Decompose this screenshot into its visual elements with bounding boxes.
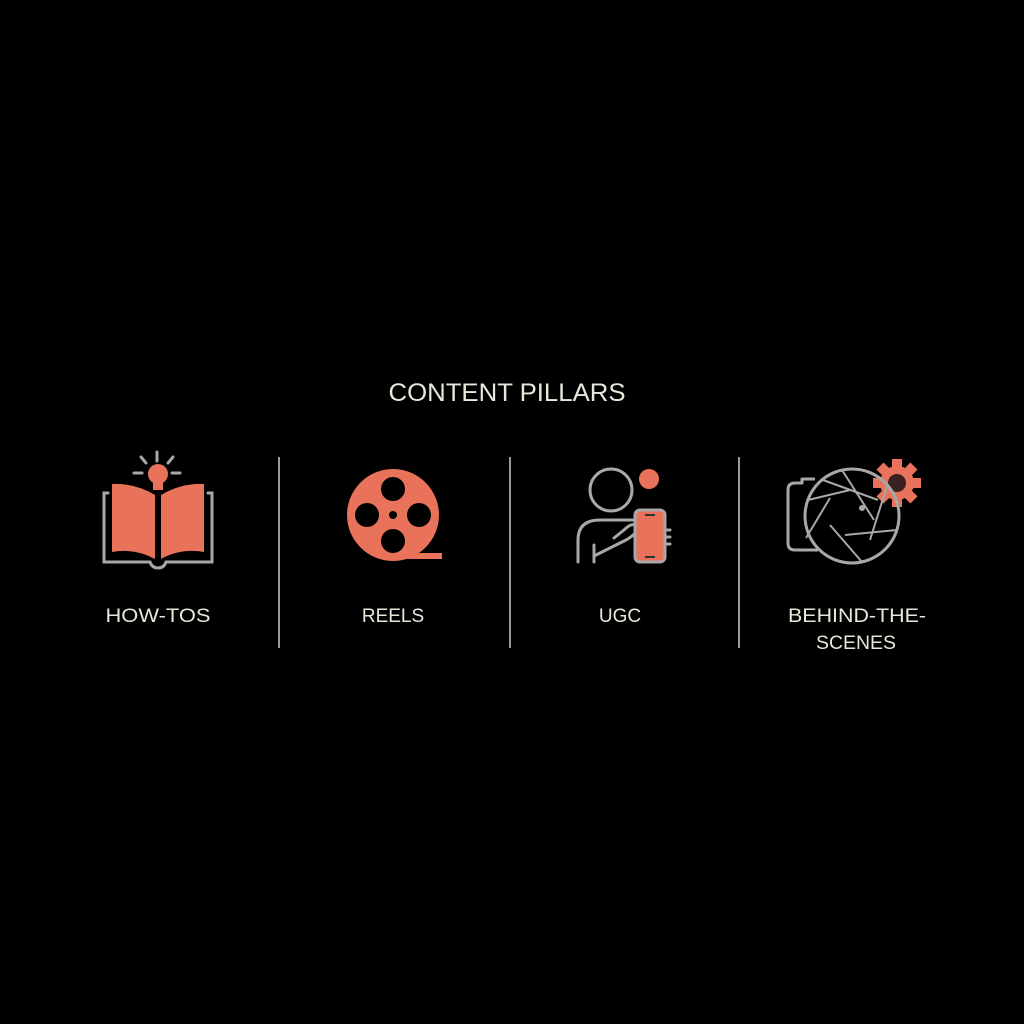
icon: person with phone xyxy=(578,469,670,562)
label: reels: REELS xyxy=(362,606,424,627)
label: how-tos: HOW-TOS xyxy=(106,606,210,627)
icon: film reel xyxy=(347,469,442,561)
icon: book with lightbulb xyxy=(104,452,212,568)
label: behind-the-scenes: BEHIND-THE- xyxy=(788,606,926,627)
title: CONTENT PILLARS xyxy=(388,379,626,407)
label: behind-the-scenes xyxy=(788,606,926,654)
label: behind-the-scenes: SCENES xyxy=(816,633,896,654)
icon: camera aperture with gear xyxy=(788,459,921,563)
label: ugc: UGC xyxy=(599,606,641,627)
